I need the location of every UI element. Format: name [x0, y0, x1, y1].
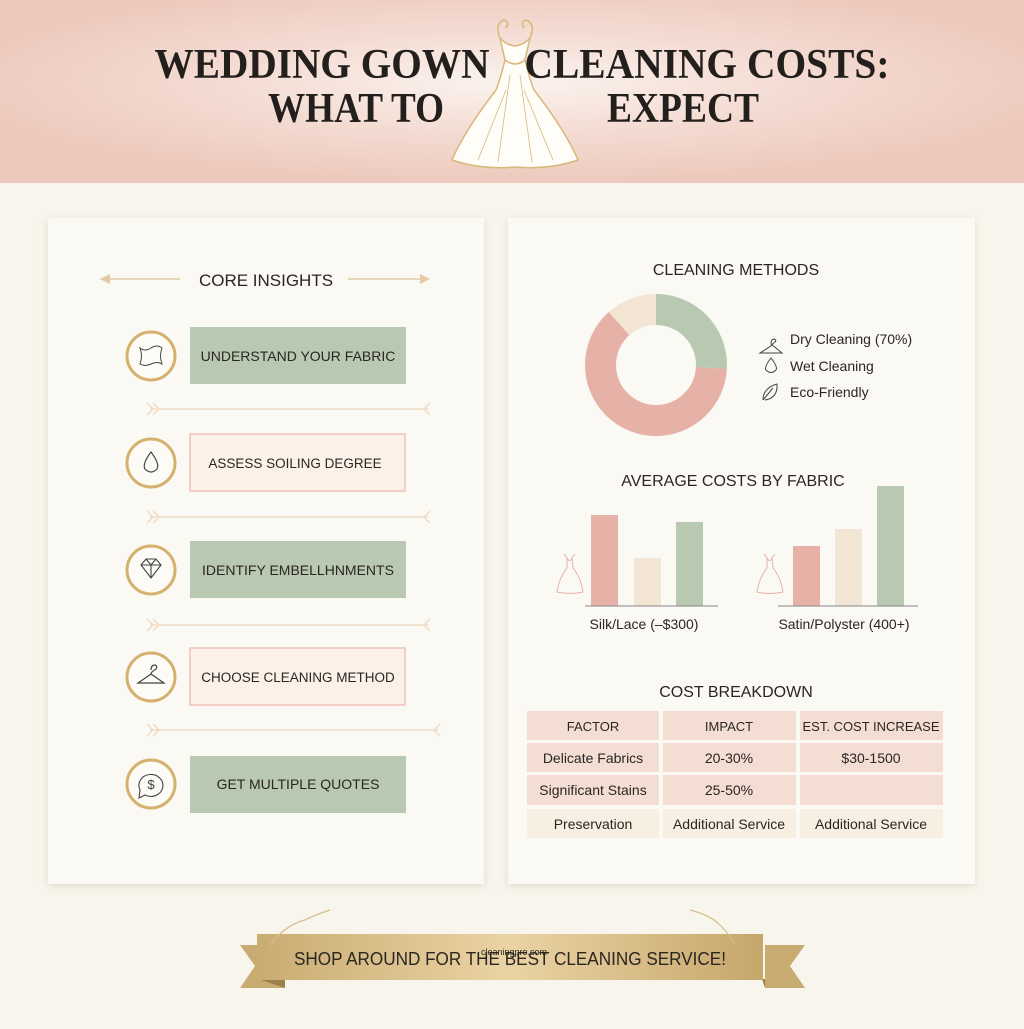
heading: cost breakdown: COST BREAKDOWN	[659, 684, 813, 701]
table: cost breakdown: Significant Stains	[539, 782, 647, 798]
footer ribbon: cleaningpro.com	[481, 947, 547, 957]
table: cost breakdown: IMPACT	[705, 719, 753, 734]
table: cost breakdown: 25-50%	[705, 782, 753, 798]
item: assess soiling degree: ASSESS SOILING DEGREE	[208, 456, 382, 471]
item: choose cleaning method: CHOOSE CLEANING METHOD	[201, 670, 395, 685]
title	[154, 42, 890, 132]
table: cost breakdown: 20-30%	[705, 750, 753, 766]
item: get multiple quotes: $	[147, 777, 155, 792]
legend: Eco-Friendly	[790, 384, 869, 400]
legend	[760, 331, 912, 400]
bar chart: silk/lace: Silk/Lace (–$300)	[590, 616, 698, 632]
item: identify embellishments: IDENTIFY EMBELLHNMENTS	[202, 562, 394, 578]
legend: Dry Cleaning (70%)	[790, 331, 912, 347]
item: understand your fabric	[127, 327, 406, 384]
table: cost breakdown: Additional Service	[815, 816, 927, 832]
bar chart: satin/polyester: Satin/Polyster (400+)	[778, 616, 910, 632]
donut chart	[600, 310, 712, 420]
item: get multiple quotes: GET MULTIPLE QUOTES	[217, 776, 379, 792]
legend: Wet Cleaning	[790, 358, 874, 374]
bar chart: silk/lace	[557, 515, 718, 632]
item: assess soiling degree	[127, 434, 405, 491]
item: choose cleaning method	[127, 648, 405, 705]
panel: charts	[508, 218, 975, 884]
heading: cleaning methods: CLEANING METHODS	[653, 262, 819, 279]
panel: core insights	[48, 218, 484, 884]
table: cost breakdown: FACTOR	[567, 719, 619, 734]
title: WEDDING GOWN	[154, 42, 490, 88]
item: understand your fabric: UNDERSTAND YOUR FABRIC	[201, 348, 395, 364]
title: WHAT TO	[268, 86, 444, 132]
title: EXPECT	[607, 86, 759, 132]
heading: core insights	[100, 271, 430, 290]
header banner	[0, 0, 1024, 183]
footer ribbon	[240, 910, 805, 988]
item: identify embellishments	[127, 541, 406, 598]
icon: wedding dress	[452, 20, 578, 168]
table: cost breakdown: EST. COST INCREASE	[802, 719, 940, 734]
title: CLEANING COSTS:	[524, 42, 890, 88]
table: cost breakdown: Preservation	[554, 816, 632, 832]
table: cost breakdown: $30-1500	[841, 750, 901, 766]
heading: core insights: CORE INSIGHTS	[199, 271, 333, 290]
item: get multiple quotes	[127, 756, 406, 813]
heading: average costs by fabric: AVERAGE COSTS BY FABRIC	[621, 473, 845, 490]
table: cost breakdown	[527, 711, 943, 838]
footer ribbon: SHOP AROUND FOR THE BEST CLEANING SERVICE!	[294, 949, 726, 969]
bar chart: satin/polyester	[757, 486, 918, 632]
table: cost breakdown: Delicate Fabrics	[543, 750, 643, 766]
table: cost breakdown: Additional Service	[673, 816, 785, 832]
